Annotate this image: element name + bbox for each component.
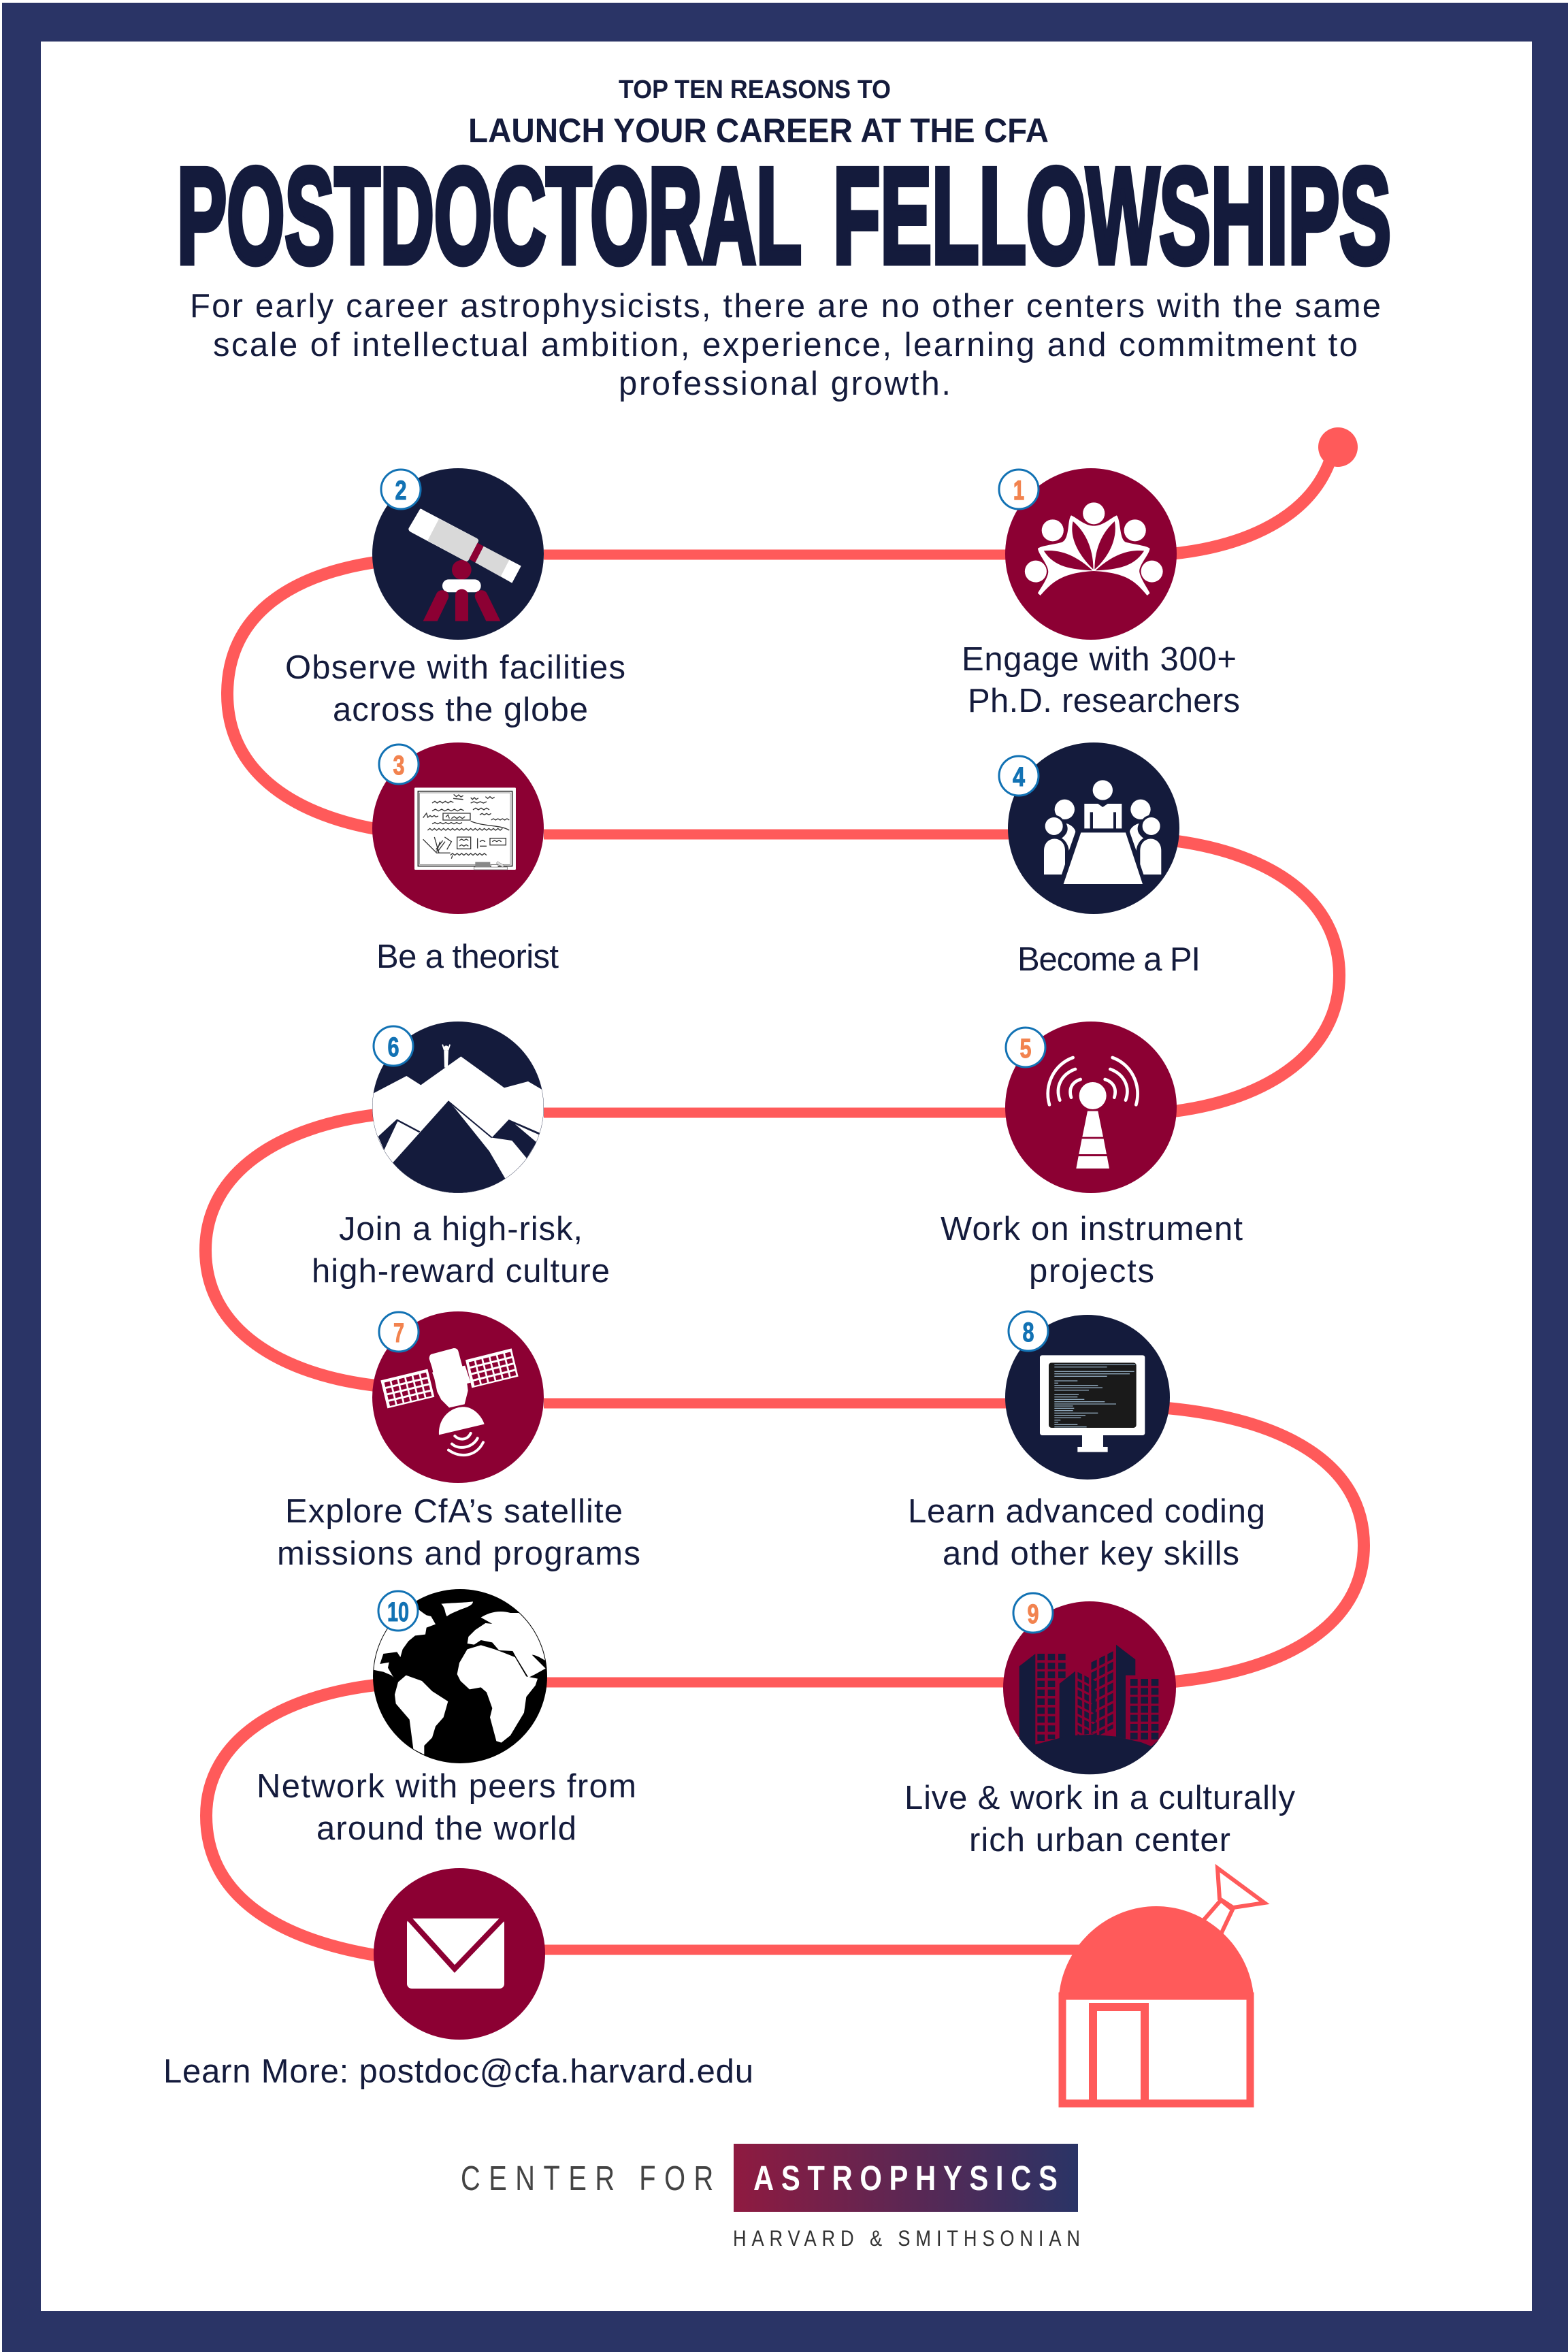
badge 3 [379,745,419,784]
step 2 [285,468,625,728]
icon: globe [372,1589,549,1763]
intro text: professional growth. [619,365,951,402]
step 10 [257,1589,636,1847]
step 8 [908,1311,1265,1572]
badge 9: 9 [1028,1599,1039,1629]
label 3: Be a theorist [376,938,559,975]
label 4: Become a PI [1017,941,1200,978]
heading: top ten reasons: TOP TEN REASONS TO [619,76,891,104]
label 6: Join a high-risk, [339,1211,583,1247]
winding path [206,427,1364,1955]
label 8 [908,1493,1265,1572]
label 10 [257,1768,636,1847]
label 6 [312,1211,610,1290]
icon: envelope [374,1868,545,2040]
logo text: astrophysics: ASTROPHYSICS [753,2159,1058,2198]
badge 6: 6 [388,1032,399,1062]
badge 9 [1013,1593,1053,1633]
badge 7: 7 [393,1318,404,1348]
icon: group of researchers [1005,468,1177,640]
badge 3: 3 [393,751,404,781]
label 2: Observe with facilities [285,649,625,686]
logo [461,2144,1080,2251]
badge 1: 1 [1013,476,1024,506]
label 10: Network with peers from [257,1768,636,1805]
badge 8 [1009,1311,1048,1351]
label 7: missions and programs [277,1535,640,1572]
badge 5: 5 [1019,1034,1032,1064]
badge 10: 10 [387,1597,409,1627]
icon: satellite [372,1311,544,1483]
badge 4: 4 [1013,762,1026,792]
icon: antenna [1005,1022,1177,1193]
contact line: Learn More: postdoc@cfa.harvard.edu [163,2053,753,2090]
label 1 [962,641,1240,719]
label 6: high-reward culture [312,1253,610,1290]
icon: mountain climber [370,1022,546,1196]
step 3 [372,742,559,975]
icon: meeting table [1008,742,1179,914]
step 4 [999,742,1200,978]
title: POSTDOCTORAL [177,140,802,292]
intro text: For early career astrophysicists, there are no other centers with the same [190,288,1381,325]
badge 2: 2 [395,476,407,506]
label 9: Live & work in a culturally [904,1780,1296,1816]
badge 1 [999,470,1039,509]
label 2: across the globe [333,691,588,728]
badge 7 [379,1312,419,1352]
header [177,76,1391,402]
logo text: center for: CENTER FOR [461,2159,713,2198]
badge 5 [1006,1028,1045,1067]
intro text [190,288,1381,402]
label 8: and other key skills [943,1535,1239,1572]
label 8: Learn advanced coding [908,1493,1265,1530]
label 10: around the world [316,1810,576,1847]
step 9 [904,1593,1296,1859]
heading: launch your career: LAUNCH YOUR CAREER AT THE CFA [468,112,1049,150]
label 5: projects [1029,1253,1154,1290]
badge 2 [381,470,421,509]
icon: telescope [372,468,544,640]
icon: city buildings [1003,1601,1182,1783]
contact step [163,1868,753,2090]
label 1: Ph.D. researchers [968,683,1240,719]
step 1 [962,468,1240,719]
label 5: Work on instrument [941,1211,1243,1247]
icon: blackboard [372,742,544,914]
label 9: rich urban center [969,1822,1230,1859]
badge 4 [999,756,1039,796]
icon: observatory [1059,1868,1264,2107]
badge 10 [378,1591,418,1631]
step 6 [312,1022,610,1290]
label 9 [904,1780,1296,1859]
logo text: harvard and smithsonian: HARVARD & SMITHSONIAN [733,2227,1080,2251]
label 5 [941,1211,1243,1290]
logo box [734,2144,1078,2212]
label 2 [285,649,625,728]
label 7 [277,1493,640,1572]
icon: monitor with code [1005,1315,1170,1480]
badge 8: 8 [1022,1318,1034,1348]
step 5 [941,1022,1243,1290]
label 1: Engage with 300+ [962,641,1237,678]
badge 6 [374,1026,413,1066]
intro text: scale of intellectual ambition, experience, learning and commitment to [213,327,1358,363]
step 7 [277,1311,640,1572]
label 7: Explore CfA’s satellite [285,1493,623,1530]
